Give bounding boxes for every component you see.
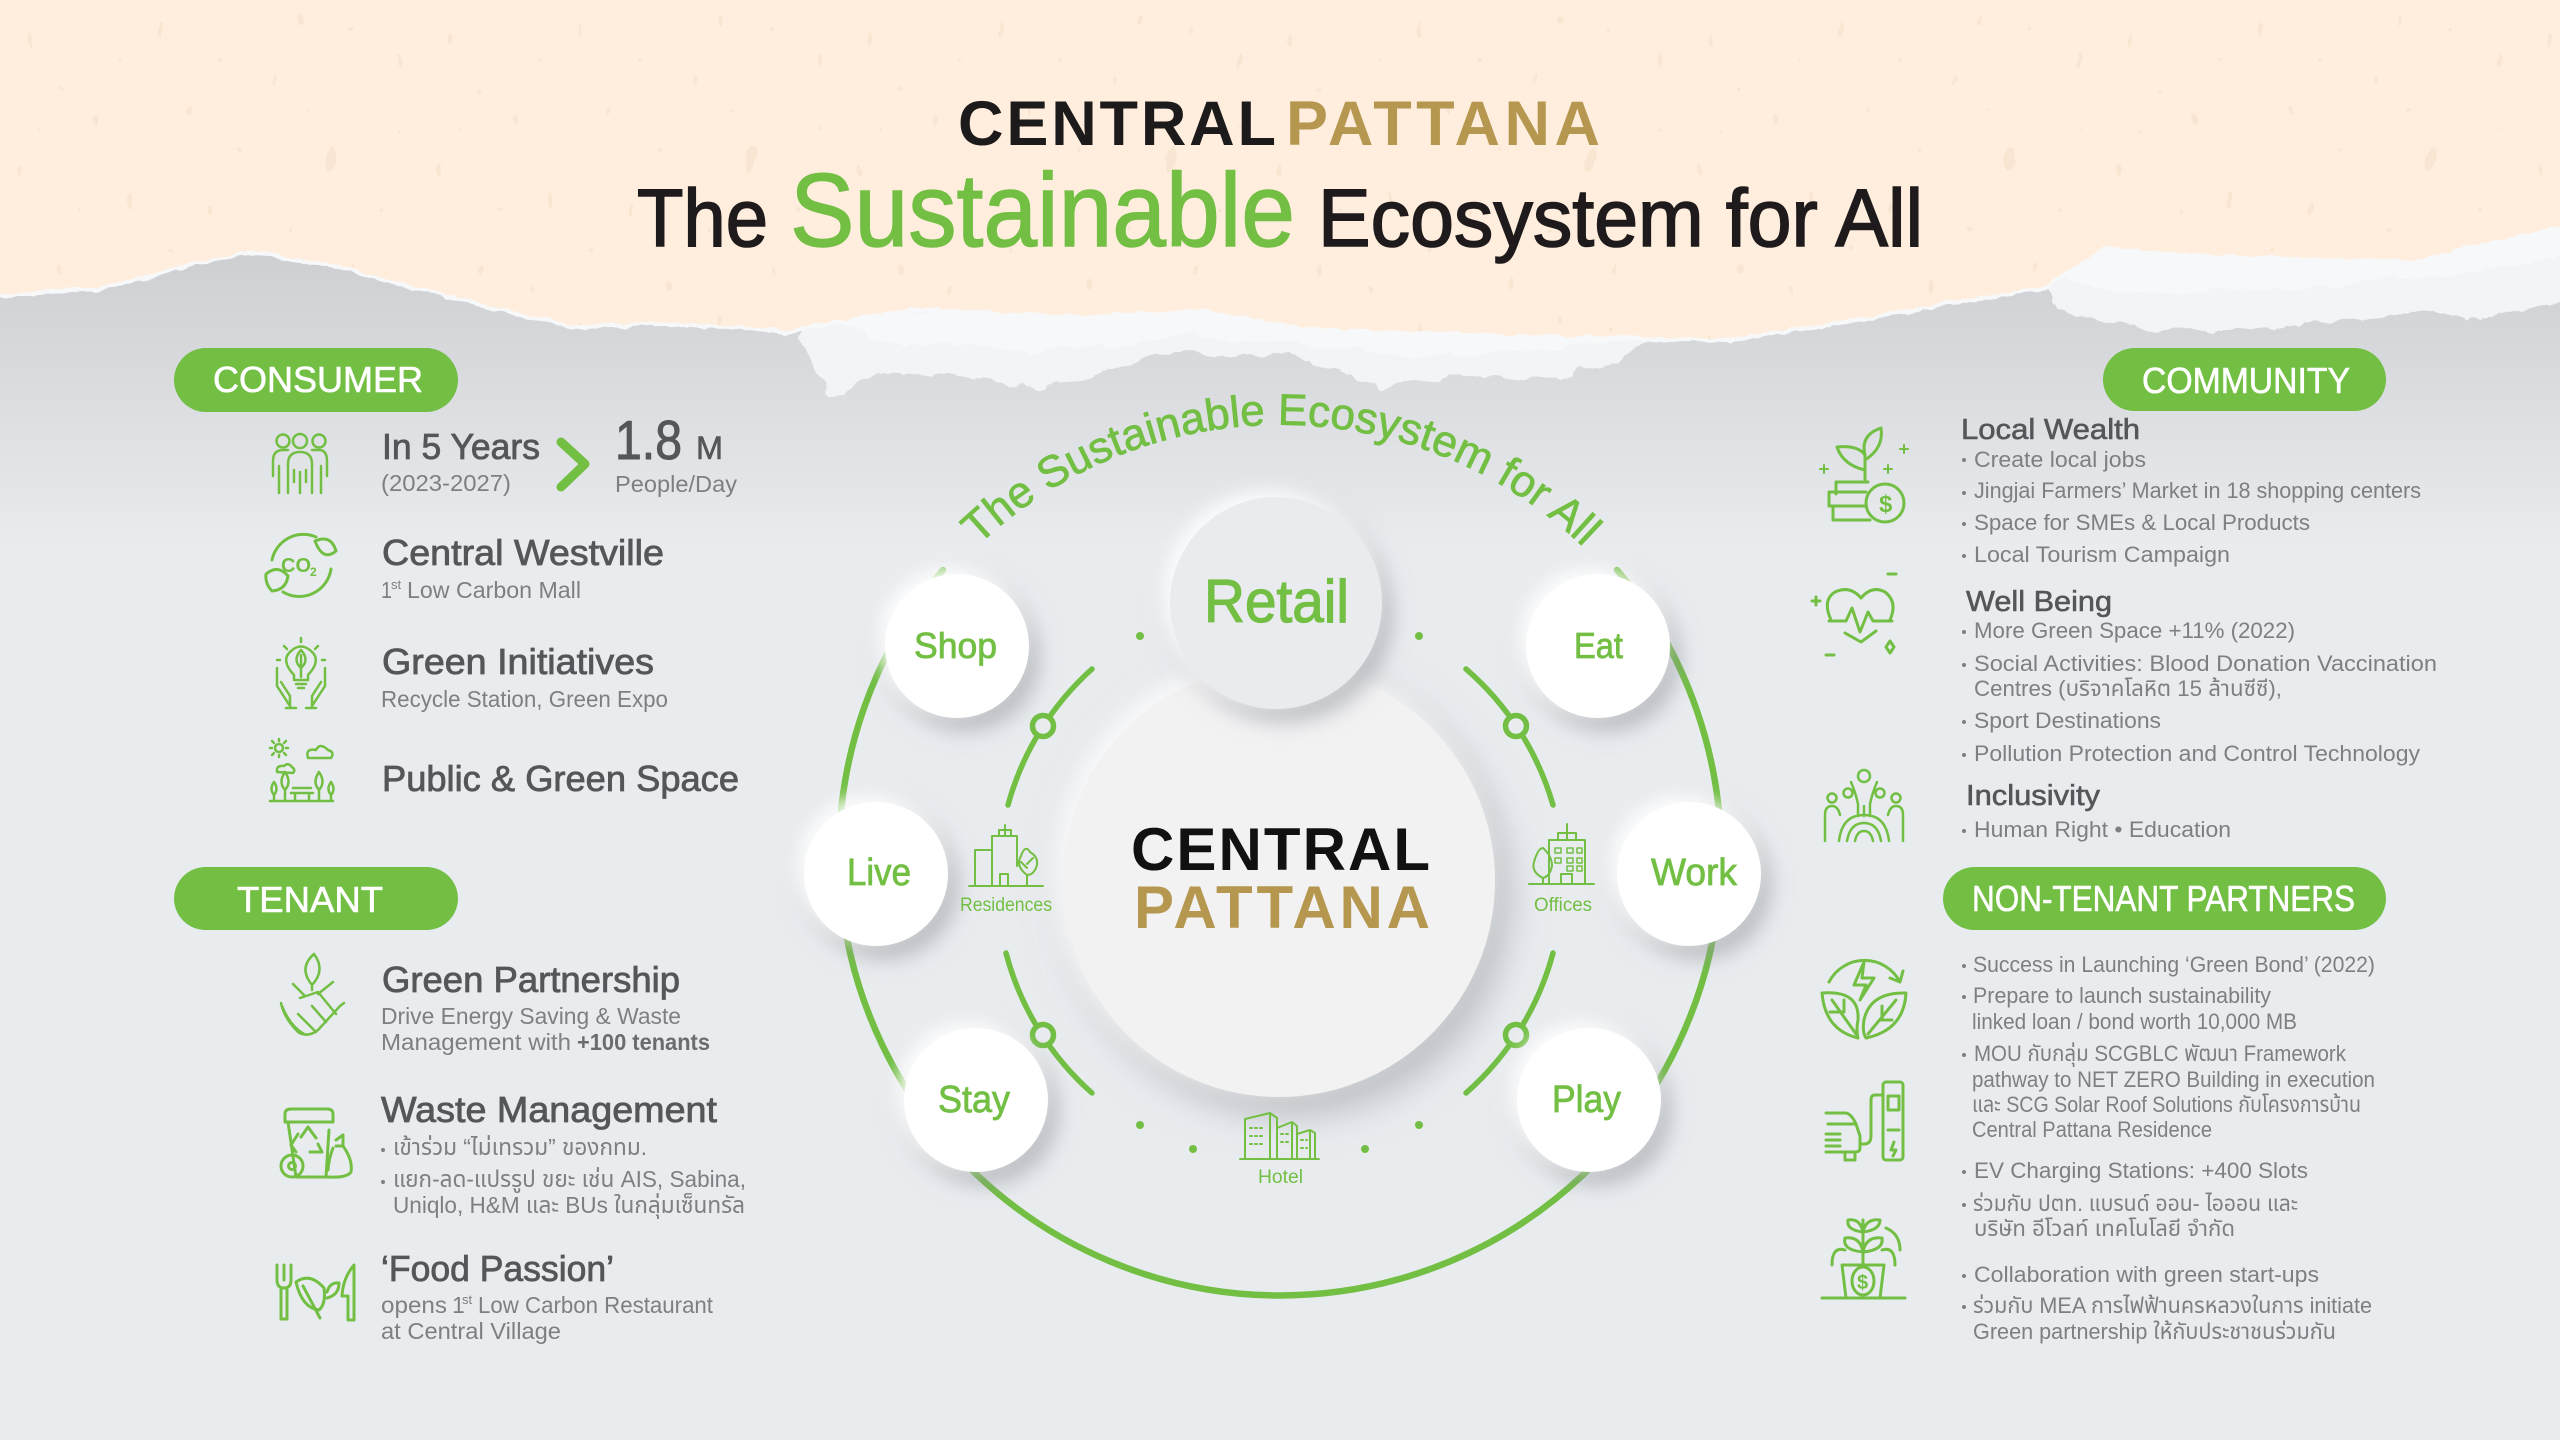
icon: co2 — [266, 534, 336, 596]
text: well being: Well Being — [1966, 586, 2112, 618]
stat: 1.8 M people per day: 1.8 — [615, 409, 682, 471]
text: waste management: เข้าร่วม “ไม่เทรวม” ของกทม. — [393, 1134, 647, 1160]
text: food passion: opens — [381, 1292, 447, 1318]
dots — [1136, 632, 1423, 1153]
text: well being: More Green Space +11% (2022) — [1974, 618, 2295, 643]
node: retail: Retail — [1204, 568, 1349, 635]
node: play: Play — [1552, 1079, 1621, 1121]
text: well being: Pollution Protection and Control Technology — [1974, 741, 2420, 766]
brand wordmark: PATTANA — [1286, 89, 1600, 159]
icon: hotel: Hotel — [1258, 1167, 1303, 1188]
text: local wealth: Jingjai Farmers’ Market in 18 shopping centers — [1974, 478, 2421, 503]
icon: plant and coins — [1820, 428, 1908, 522]
centre logo circle — [1063, 665, 1495, 1097]
torn white paper layer — [786, 200, 2560, 398]
node: work: Work — [1651, 852, 1738, 894]
icon: heart — [1812, 574, 1896, 655]
text: green initiatives: Green Initiatives — [382, 641, 654, 682]
icon: people — [273, 434, 327, 493]
icon: offices — [1529, 824, 1594, 916]
text: central westville: st — [391, 577, 402, 592]
headline: The — [637, 173, 768, 264]
panel: non-tenant partners — [1822, 867, 2386, 1344]
text: green partnership: +100 tenants — [577, 1029, 710, 1055]
text: partners list: MOU กับกลุ่ม SCGBLC พัฒนา Framework — [1974, 1041, 2347, 1067]
arrow: chevron — [561, 442, 585, 487]
node: work — [1617, 802, 1761, 946]
text: local wealth — [1961, 414, 2421, 567]
arc heading: The Sustainable Ecosystem for All — [958, 394, 1604, 546]
text: inclusivity — [1962, 780, 2231, 842]
icon: residences — [960, 825, 1052, 916]
text: central westville — [381, 532, 664, 603]
text: partners list: ร่วมกับ ปตท. แบรนด์ ออน- ไอออน และ — [1973, 1191, 2298, 1216]
text: in 5 years: In 5 Years — [382, 426, 540, 467]
node: live: Live — [847, 852, 911, 894]
text: central westville: Low Carbon Mall — [407, 577, 581, 603]
node: play — [1517, 1028, 1661, 1172]
node: eat — [1526, 574, 1670, 718]
text: partners list: Prepare to launch sustainability — [1973, 983, 2271, 1008]
text: partners list: บริษัท อีโวลท์ เทคโนโลยี จำกัด — [1974, 1216, 2235, 1241]
text: waste management — [381, 1089, 746, 1219]
icon: plant pot with dollar: $ — [1857, 1272, 1868, 1294]
title — [637, 89, 1923, 269]
text: partners list: และ SCG Solar Roof Solutions กับโครงการบ้าน — [1972, 1092, 2361, 1117]
icon: inclusivity — [1825, 770, 1903, 841]
headline — [637, 153, 1923, 269]
heading: non-tenant partners pill: NON-TENANT PARTNERS — [1972, 878, 2355, 919]
panel: consumer — [174, 348, 739, 801]
text: food passion: st — [462, 1292, 472, 1307]
text: well being: Sport Destinations — [1974, 708, 2161, 733]
icon: hotel — [1240, 1113, 1319, 1188]
node: eat: Eat — [1574, 625, 1623, 666]
text: inclusivity: Inclusivity — [1966, 780, 2101, 812]
panel: community — [1812, 348, 2437, 842]
text: public and green space: Public & Green Space — [382, 758, 739, 799]
panel: tenant — [174, 867, 746, 1344]
text: partners list — [1962, 952, 2375, 1344]
text: green initiatives — [381, 641, 668, 712]
node: stay: Stay — [938, 1079, 1010, 1121]
stat: 1.8 M people per day: M — [696, 430, 723, 466]
diagram: ecosystem wheel — [798, 394, 1780, 1299]
heading: tenant pill — [174, 867, 458, 930]
headline: Sustainable — [790, 153, 1295, 269]
heading: tenant pill: TENANT — [237, 879, 383, 920]
icon: ev charger — [1826, 1082, 1903, 1160]
icon: fork, leaf and knife — [277, 1265, 354, 1320]
node: live — [804, 802, 948, 946]
text: inclusivity: Human Right • Education — [1974, 817, 2231, 842]
icon: recycling bin — [281, 1109, 351, 1177]
text: green partnership: Drive Energy Saving & Waste — [381, 1003, 681, 1029]
text: food passion — [381, 1248, 714, 1344]
text: partners list: linked loan / bond worth 10,000 MB — [1972, 1009, 2297, 1034]
text: local wealth: Local Tourism Campaign — [1974, 542, 2230, 567]
text: well being: Social Activities: Blood Donation Vaccination — [1974, 651, 2437, 676]
text: food passion: at Central Village — [381, 1318, 561, 1344]
text: partners list: EV Charging Stations: +400 Slots — [1974, 1158, 2308, 1183]
text: partners list: Green partnership ให้กับประชาชนร่วมกัน — [1973, 1319, 2336, 1344]
icon: bulb and hands — [277, 638, 325, 708]
icon: co2: CO — [281, 555, 311, 577]
centre logo circle: CENTRAL — [1131, 816, 1430, 883]
text: central westville: 1 — [381, 577, 392, 603]
text: in 5 years: (2023-2027) — [381, 470, 511, 496]
inner arcs — [1006, 669, 1553, 1093]
text: in 5 years — [381, 426, 540, 496]
centre logo circle: PATTANA — [1134, 874, 1430, 941]
icon: handshake with leaf — [281, 954, 344, 1035]
stat: 1.8 M people per day: People/Day — [615, 471, 737, 497]
text: food passion: Low Carbon Restaurant — [478, 1292, 714, 1318]
icon: residences: Residences — [960, 895, 1052, 916]
icon: co2: 2 — [310, 565, 317, 579]
text: local wealth: Local Wealth — [1961, 414, 2140, 446]
text: green partnership: Green Partnership — [382, 959, 680, 1000]
text: central westville: Central Westville — [382, 532, 664, 573]
text: green partnership: Management with — [381, 1029, 571, 1055]
text: waste management: Waste Management — [381, 1089, 717, 1130]
text: partners list: Success in Launching ‘Green Bond’ (2022) — [1973, 952, 2375, 977]
node: shop: Shop — [914, 625, 997, 666]
icon: offices: Offices — [1534, 895, 1592, 916]
text: partners list: pathway to NET ZERO Building in execution — [1972, 1067, 2375, 1092]
heading: non-tenant partners pill — [1943, 867, 2386, 930]
text: well being — [1962, 586, 2437, 766]
text: food passion: ‘Food Passion’ — [381, 1248, 614, 1289]
icon: park — [270, 739, 334, 801]
text: food passion: 1 — [452, 1292, 465, 1318]
torn cream header — [0, 0, 2560, 342]
text: well being: Centres (บริจาคโลหิต 15 ล้านซีซี), — [1974, 676, 2282, 701]
icon: energy leaves — [1822, 960, 1906, 1038]
stat: 1.8 M people per day — [615, 409, 737, 497]
headline: Ecosystem for All — [1318, 173, 1923, 264]
text: green partnership — [381, 959, 710, 1055]
text: green initiatives: Recycle Station, Green Expo — [381, 686, 668, 712]
outer ring — [839, 570, 1721, 1295]
text: local wealth: Create local jobs — [1974, 447, 2146, 472]
node: shop — [885, 574, 1029, 718]
text: partners list: Collaboration with green start-ups — [1974, 1262, 2319, 1287]
heading: consumer pill — [174, 348, 458, 412]
text: waste management: Uniqlo, H&M และ BUs ในกลุ่มเซ็นทรัล — [393, 1192, 745, 1219]
heading: community pill — [2103, 348, 2386, 411]
text: waste management: แยก-ลด-แปรรูป ขยะ เช่น AIS, Sabina, — [393, 1166, 746, 1194]
brand wordmark — [958, 89, 1600, 159]
text: partners list: Central Pattana Residence — [1972, 1117, 2212, 1142]
heading: consumer pill: CONSUMER — [213, 359, 423, 400]
arc nodes — [1032, 716, 1526, 1046]
text: local wealth: Space for SMEs & Local Products — [1974, 510, 2310, 535]
node: retail — [1170, 497, 1382, 709]
text: partners list: ร่วมกับ MEA การไฟฟ้านครหลวงในการ initiate — [1973, 1293, 2372, 1318]
icon: plant pot with dollar — [1822, 1220, 1905, 1298]
heading: community pill: COMMUNITY — [2142, 360, 2350, 401]
node: stay — [904, 1028, 1048, 1172]
brand wordmark: CENTRAL — [958, 89, 1276, 159]
icon: plant and coins: $ — [1879, 491, 1893, 518]
